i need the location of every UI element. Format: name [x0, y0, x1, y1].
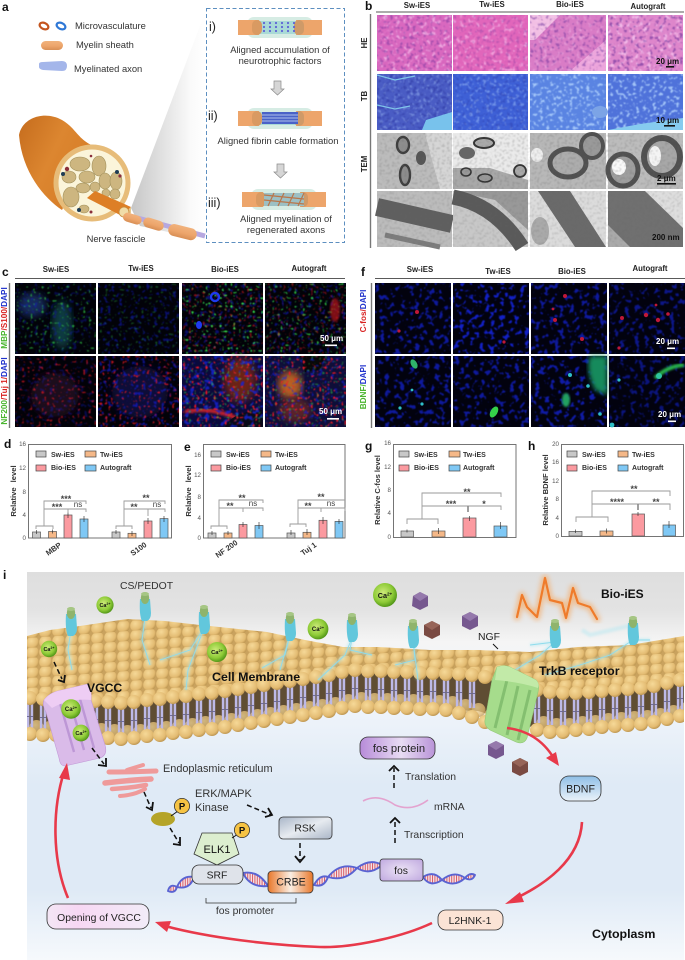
scale bar 20 um top: 20 μm	[656, 337, 679, 346]
row label C-fos/DAPI: C-fos/DAPI	[359, 290, 368, 332]
BDNF box	[560, 776, 601, 801]
legend h: Bio-iES	[582, 465, 607, 472]
legend g: Bio-iES	[414, 465, 439, 472]
row TB images	[377, 74, 683, 130]
Bio-iES label: Bio-iES	[601, 587, 644, 601]
RSK box: RSK	[294, 824, 316, 834]
y axis h: 12	[552, 478, 560, 485]
panel label i: i	[3, 568, 6, 582]
panel i: signalling pathway	[3, 568, 685, 960]
bars e	[208, 520, 343, 538]
step i caption: neurotrophic factors	[239, 55, 322, 66]
calcium ions: 2+	[320, 625, 325, 630]
column headers c: Sw-iES	[43, 265, 69, 274]
legend g: Tw-iES	[463, 452, 486, 459]
significance brackets d: ***	[61, 494, 72, 504]
MBP row images	[15, 283, 346, 354]
column headers b	[404, 0, 666, 11]
legend: myelinated axon: Myelinated axon	[74, 63, 142, 74]
significance brackets h	[576, 484, 670, 522]
calcium ions: Ca	[99, 603, 106, 609]
y axis h: 0	[556, 533, 560, 540]
step i caption: Aligned accumulation of	[230, 44, 330, 55]
column headers f: Tw-iES	[485, 267, 511, 276]
DNA strand	[168, 862, 475, 892]
column headers b: Autograft	[630, 2, 666, 11]
y axis d	[9, 441, 172, 542]
SRF box	[192, 865, 243, 884]
zoom wedge	[131, 10, 206, 240]
panel label e: e	[184, 440, 191, 454]
ER label: Endoplasmic reticulum	[163, 763, 273, 775]
calcium ions: 2+	[83, 730, 87, 734]
scale bar 20 um: 20 μm	[656, 57, 679, 66]
legend: myelinated axon	[39, 61, 142, 74]
BDNF box: BDNF	[566, 784, 595, 796]
scale bar 10 um: 10 μm	[656, 116, 679, 125]
fos promoter bracket	[206, 898, 296, 917]
chart g: relative C-fos level	[365, 439, 516, 541]
arrow ii to iii	[274, 164, 287, 178]
row label BDNF/DAPI: BDNF/DAPI	[359, 365, 368, 409]
y axis e: 8	[198, 494, 202, 501]
legend g: Autograft	[463, 465, 495, 472]
Cytoplasm label: Cytoplasm	[592, 927, 655, 941]
ELK1: P	[239, 826, 246, 836]
x labels d	[44, 540, 148, 558]
row label MBP/S100/DAPI: MBP/S100/DAPI	[0, 287, 9, 349]
significance brackets e: **	[238, 493, 246, 503]
y axis h: Relative BDNF level	[541, 454, 550, 526]
scale bar 200 nm: 200 nm	[652, 233, 680, 242]
error bars e	[212, 517, 339, 535]
legend d: Sw-iES	[51, 452, 75, 459]
fos promoter bracket: fos promoter	[216, 906, 275, 917]
column headers c: Autograft	[291, 264, 327, 273]
column headers f: Autograft	[632, 264, 668, 273]
Bio-iES stimulation wave	[517, 578, 597, 619]
endoplasmic reticulum	[105, 765, 156, 796]
row labels b: TEM	[360, 156, 369, 172]
CRBE box	[268, 871, 313, 893]
row labels b	[360, 38, 369, 172]
step ii caption: Aligned fibrin cable formation	[218, 135, 338, 146]
fos protein box: fos protein	[373, 743, 425, 755]
column headers c: Bio-iES	[211, 265, 239, 274]
panel c: MBP/S100 and NF200/Tuj1 immunofluorescence	[0, 264, 346, 428]
panel a: nerve schematic	[2, 0, 344, 244]
calcium ions: Ca	[75, 731, 83, 737]
bars g	[401, 518, 507, 537]
step ii diagram	[208, 108, 322, 129]
calcium ions: Ca	[65, 707, 73, 713]
bars h	[569, 514, 676, 536]
significance brackets g	[407, 487, 501, 524]
panel label f: f	[361, 265, 366, 279]
y axis d: 8	[23, 489, 27, 496]
significance brackets e: **	[317, 492, 325, 502]
VGCC channel	[43, 684, 106, 766]
CRBE box: CRBE	[276, 876, 306, 888]
significance brackets e	[211, 492, 345, 529]
x labels e: NF 200	[214, 538, 239, 560]
red arrow: L2HNK-1 to opening of VGCC	[155, 921, 432, 947]
y axis d: 12	[19, 465, 27, 472]
panel label a: a	[2, 0, 9, 14]
calcium ions: 2+	[50, 646, 55, 650]
dashed inset box	[206, 8, 344, 242]
significance brackets h: **	[630, 484, 638, 494]
scale bar 2 um: 2 μm	[657, 174, 676, 183]
row label NF200/Tuj 1/DAPI: NF200/Tuj 1/DAPI	[0, 357, 9, 425]
fos box: fos	[394, 866, 408, 877]
legend g	[399, 451, 495, 472]
bars d	[32, 515, 168, 538]
x labels d: S100	[129, 540, 148, 558]
background gradient	[27, 572, 684, 960]
step i diagram	[209, 17, 322, 38]
error bars d	[36, 512, 164, 536]
dashed arrow: kinase to ELK1	[170, 828, 180, 845]
nerve fascicle illustration	[19, 116, 205, 241]
significance brackets h: ****	[610, 497, 624, 507]
calcium ions: Ca	[43, 647, 50, 653]
row HE images	[377, 15, 683, 71]
legend: myelin sheath: Myelin sheath	[76, 39, 134, 50]
calcium ions: 2+	[219, 649, 224, 653]
opening of VGCC box	[47, 904, 149, 929]
row TEM overview images	[377, 133, 683, 189]
y axis g: Relative C-fos level	[373, 455, 382, 525]
column headers b: Sw-iES	[404, 1, 430, 10]
NGF label	[478, 632, 500, 649]
y axis g	[373, 440, 516, 541]
legend h: Tw-iES	[632, 452, 655, 459]
arrow i to ii	[271, 81, 284, 95]
legend h	[567, 451, 664, 472]
y axis d: 0	[23, 535, 27, 542]
column headers c	[43, 264, 327, 274]
Cell Membrane label: Cell Membrane	[212, 670, 300, 684]
mRNA	[363, 798, 465, 813]
RSK box	[279, 817, 332, 839]
calcium ions: 2+	[73, 705, 78, 710]
panel f: C-fos and BDNF immunofluorescence	[359, 264, 685, 428]
error bars g	[407, 516, 500, 534]
dashed arrow: RSK to CRBE	[295, 843, 305, 862]
x labels e	[214, 538, 319, 560]
y axis h: 4	[556, 515, 560, 522]
red arrow: TrkB to BDNF	[507, 728, 559, 766]
y axis g: 8	[388, 487, 392, 494]
calcium ions: Ca	[211, 650, 219, 656]
y axis h: 20	[552, 441, 560, 448]
fos box	[380, 859, 423, 881]
legend d: Tw-iES	[100, 452, 123, 459]
y axis d: Relative level	[9, 465, 18, 517]
y axis e	[184, 444, 345, 542]
y axis g: 16	[384, 440, 392, 447]
x labels d: MBP	[44, 540, 63, 557]
legend d	[36, 451, 132, 472]
calcium ions: Ca	[378, 591, 387, 600]
y axis d: 4	[23, 512, 27, 519]
legend h: Autograft	[632, 465, 664, 472]
legend e: Tw-iES	[275, 452, 298, 459]
legend: microvasculature	[39, 20, 146, 31]
red arrow: BDNF to L2HNK-1	[505, 822, 582, 904]
legend e	[211, 451, 307, 472]
conductive fibres on the membrane	[66, 592, 650, 690]
arrow: transcription	[390, 818, 464, 843]
significance brackets d: ns	[74, 500, 82, 509]
step iii caption: regenerated axons	[247, 224, 325, 235]
y axis d: 16	[19, 441, 27, 448]
caption: nerve fascicle: Nerve fascicle	[87, 233, 145, 244]
significance brackets d: ns	[153, 500, 161, 509]
significance brackets g: *	[482, 499, 486, 509]
y axis g: 0	[388, 534, 392, 541]
column headers f: Sw-iES	[407, 265, 433, 274]
step ii diagram: ii)	[208, 109, 218, 123]
column headers b: Bio-iES	[556, 0, 584, 9]
scale bar 20 um bottom: 20 μm	[658, 410, 681, 419]
panel label g: g	[365, 439, 372, 453]
opening of VGCC box: Opening of VGCC	[57, 913, 141, 924]
significance brackets e: ns	[249, 499, 257, 508]
significance brackets e: **	[226, 501, 234, 511]
red arrow: opening of VGCC to VGCC	[55, 763, 70, 898]
NGF cubes	[412, 592, 528, 776]
y axis e: 12	[194, 472, 202, 479]
y axis e: 16	[194, 452, 202, 459]
y axis h	[541, 441, 684, 540]
arrow: transcription: Transcription	[404, 830, 464, 841]
y axis h: 8	[556, 496, 560, 503]
significance brackets d	[36, 493, 165, 529]
significance brackets e: ns	[327, 499, 335, 508]
VGCC label: VGCC	[87, 681, 122, 695]
SRF box: SRF	[207, 870, 227, 882]
y axis e: 4	[198, 515, 202, 522]
legend h: Sw-iES	[582, 452, 606, 459]
L2HNK-1 box: L2HNK-1	[449, 916, 492, 927]
ELK1: ELK1	[204, 844, 230, 856]
significance brackets d: **	[142, 493, 150, 503]
ELK1	[194, 822, 250, 865]
calcium ions: 2+	[106, 602, 111, 606]
significance brackets d: **	[130, 502, 138, 512]
legend e: Sw-iES	[226, 452, 250, 459]
ERK/MAPK kinase: Kinase	[195, 802, 229, 814]
NGF label: NGF	[478, 632, 500, 643]
calcium ions	[41, 583, 397, 741]
y axis g: 4	[388, 510, 392, 517]
mRNA: mRNA	[434, 802, 465, 813]
TrkB receptor label: TrkB receptor	[539, 664, 620, 678]
calcium ions: 2+	[387, 592, 393, 597]
chart e: NF 200 and Tuj 1 levels	[184, 440, 345, 560]
arrow: translation: Translation	[405, 772, 456, 783]
chart d: MBP and S100 levels	[4, 437, 172, 558]
column headers f	[407, 264, 668, 276]
dashed arrow: ER to kinase	[144, 792, 153, 810]
legend e: Autograft	[275, 465, 307, 472]
step iii diagram: iii)	[208, 196, 220, 210]
column headers c: Tw-iES	[128, 264, 154, 273]
calcium ions: Ca	[312, 627, 320, 633]
fos protein box	[360, 737, 435, 759]
significance brackets h: **	[652, 497, 660, 507]
step iii caption: Aligned myelination of	[240, 213, 332, 224]
chart h: relative BDNF level	[528, 439, 684, 540]
legend e: Bio-iES	[226, 465, 251, 472]
significance brackets d: ***	[52, 502, 63, 512]
significance brackets e: **	[304, 501, 312, 511]
step i diagram: i)	[209, 20, 216, 34]
scale bar 50 um top: 50 μm	[320, 334, 343, 343]
column headers b: Tw-iES	[479, 0, 505, 9]
ERK/MAPK kinase: P	[179, 802, 186, 812]
dashed arrow: kinase to RSK	[247, 805, 272, 817]
y axis e: Relative level	[184, 465, 193, 517]
column headers f: Bio-iES	[558, 267, 586, 276]
TrkB receptor	[485, 666, 539, 743]
legend d: Bio-iES	[51, 465, 76, 472]
legend: microvasculature: Microvasculature	[75, 20, 146, 31]
legend d: Autograft	[100, 465, 132, 472]
row labels b: TB	[360, 90, 369, 101]
legend g: Sw-iES	[414, 452, 438, 459]
cell membrane lipid bilayer	[23, 619, 685, 746]
arrow: translation	[389, 766, 456, 788]
x labels e: Tuj 1	[299, 540, 319, 558]
CS/PEDOT label: CS/PEDOT	[120, 581, 174, 592]
legend: myelin sheath	[41, 39, 134, 50]
error bars h	[576, 512, 669, 534]
row TEM high magnification images	[377, 191, 683, 247]
BDNF row images	[375, 356, 685, 427]
step iii diagram	[208, 189, 326, 210]
panel b: histology grid	[360, 0, 684, 248]
NF200 row images	[15, 356, 346, 427]
scale bar 50 um bottom: 50 μm	[319, 407, 342, 416]
y axis e: 0	[198, 535, 202, 542]
y axis g: 12	[384, 464, 392, 471]
panel label c: c	[2, 265, 9, 279]
C-fos row images	[375, 283, 685, 354]
significance brackets g: **	[463, 487, 471, 497]
y axis h: 16	[552, 459, 560, 466]
row labels b: HE	[360, 38, 369, 48]
panel label d: d	[4, 437, 11, 451]
dashed arrow: VGCC to ER	[92, 748, 106, 766]
panel label h: h	[528, 439, 535, 453]
dashed arrow: Ca into VGCC	[54, 662, 65, 682]
significance brackets g: ***	[446, 499, 457, 509]
ERK/MAPK kinase	[151, 788, 253, 826]
ERK/MAPK kinase: ERK/MAPK	[195, 788, 253, 800]
L2HNK-1 box	[438, 910, 503, 930]
